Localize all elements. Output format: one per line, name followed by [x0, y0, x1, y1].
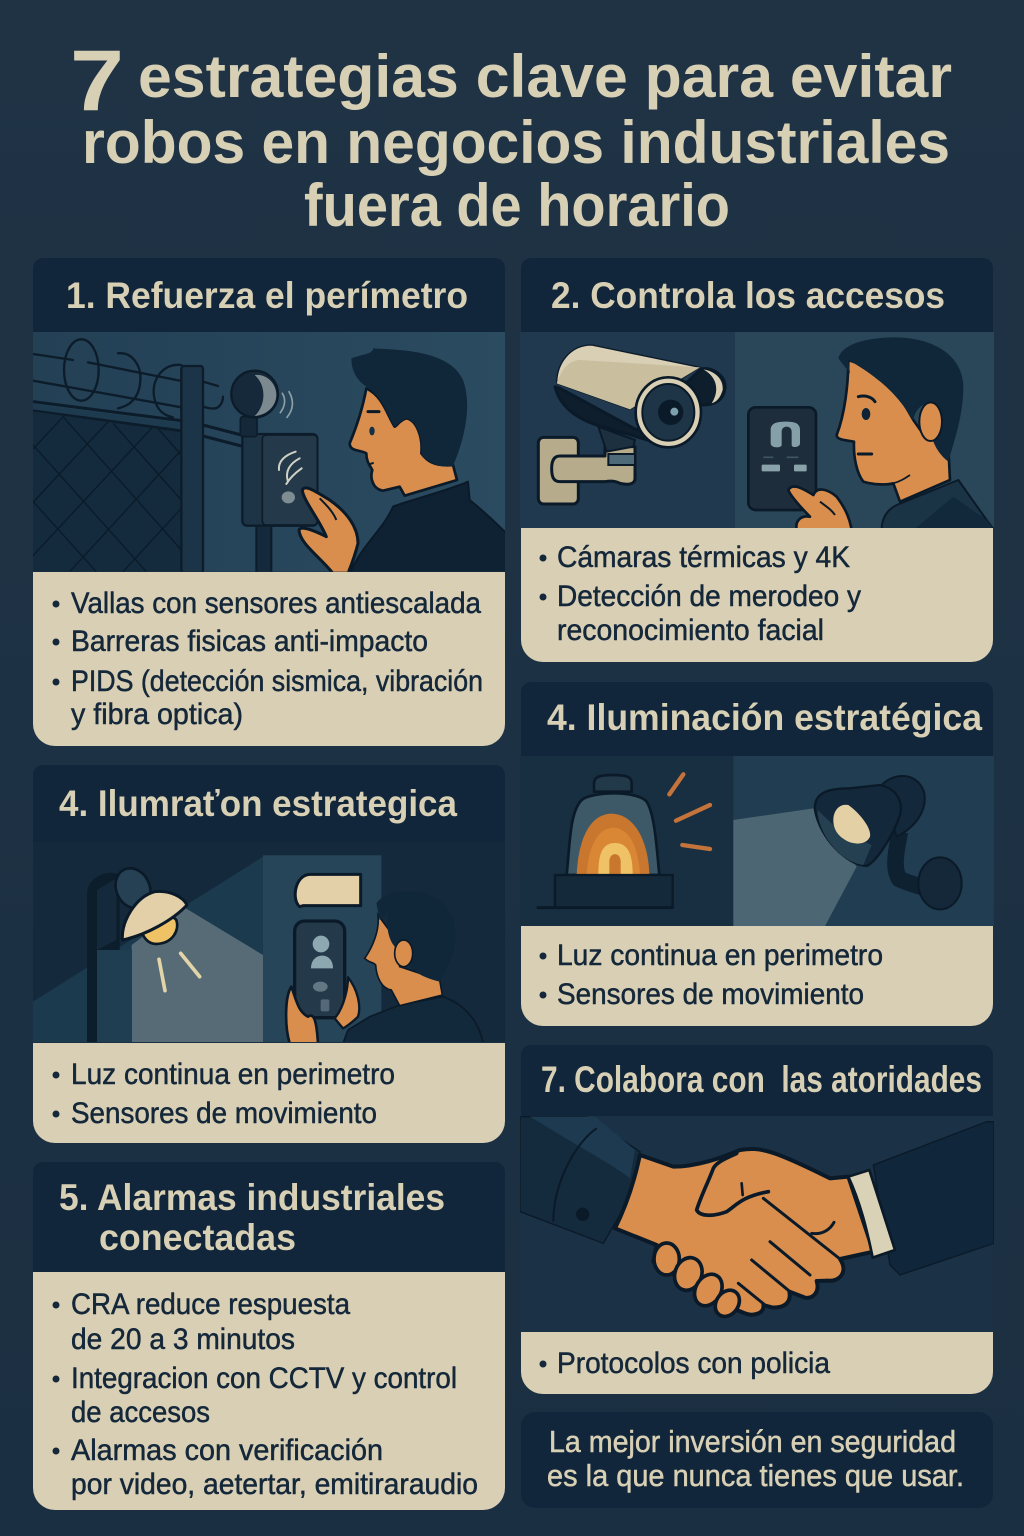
text block: bullet panel 7: Protocolos con policia: [557, 1347, 830, 1380]
title: [70, 33, 952, 239]
panel: 7 colabora con las autoridades: [520, 1045, 994, 1394]
text block: bullets right lighting panel: [521, 926, 993, 1026]
text block: bullets left lighting panel: Luz continua en perimetro: [71, 1058, 395, 1091]
panel: 5 alarmas industriales: [33, 1162, 505, 1510]
title: robos en negocios industriales: [82, 109, 950, 176]
text block: bullets left lighting panel: Sensores de movimiento: [71, 1097, 377, 1130]
text block: bullets panel 2: Cámaras térmicas y 4K: [557, 541, 850, 574]
callout: closing message: [521, 1412, 993, 1508]
text block: bullets panel 5: de accesos: [71, 1396, 210, 1429]
heading: refuerza el perímetro: 1. Refuerza el perímetro: [66, 275, 468, 316]
text block: bullets panel 5: por video, aetertar, emitiraraudio: [71, 1468, 478, 1501]
illustration: beacon and wall light: [520, 756, 994, 926]
heading: alarmas industriales conectadas: conectadas: [99, 1217, 296, 1258]
title: estrategias clave para evitar: [138, 43, 952, 110]
text block: bullets panel 1: Barreras fisicas anti-impacto: [71, 625, 428, 658]
illustration: handshake: [520, 1116, 994, 1333]
callout: closing message: es la que nunca tienes que usar.: [547, 1458, 964, 1493]
panel: 2 controla los accesos: [520, 258, 994, 662]
text block: bullets left lighting panel: [33, 1043, 505, 1143]
text block: bullets panel 1: PIDS (detección sismica, vibración: [71, 665, 483, 698]
title: fuera de horario: [304, 172, 730, 239]
title: 7: [70, 33, 124, 129]
text block: bullets panel 1: y fibra optica): [71, 698, 243, 731]
illustration: street lamp and intercom: [33, 842, 505, 1043]
text block: bullets panel 5: CRA reduce respuesta: [71, 1288, 350, 1321]
text block: bullets panel 2: reconocimiento facial: [557, 614, 824, 647]
text block: bullets right lighting panel: Sensores de movimiento: [557, 978, 864, 1011]
text block: bullets panel 2: [521, 528, 993, 662]
text block: bullets panel 1: Vallas con sensores antiescalada: [71, 587, 481, 620]
heading: iluminación estratégica: 4. Iluminación estratégica: [547, 697, 982, 738]
panel: 4 iluminación estratégica (right): [520, 682, 994, 1026]
heading: ilumraťon estrategica: 4. Ilumraťon estrategica: [59, 783, 457, 824]
panel: 4 iluminación estratégica (left): [33, 765, 505, 1143]
text block: bullets panel 1: [33, 572, 505, 746]
text block: bullet panel 7: [521, 1332, 993, 1394]
text block: bullets panel 2: Detección de merodeo y: [557, 580, 861, 613]
callout: closing message: La mejor inversión en seguridad: [549, 1424, 956, 1459]
panel: 1 refuerza el perímetro: [20, 258, 506, 746]
heading: alarmas industriales conectadas: [59, 1177, 445, 1258]
heading: alarmas industriales conectadas: 5. Alarmas industriales: [59, 1177, 445, 1218]
illustration: fence, sensor and guard: [20, 332, 506, 573]
text block: bullets right lighting panel: Luz continua en perimetro: [557, 939, 883, 972]
heading: controla los accesos: 2. Controla los accesos: [551, 275, 945, 316]
text block: bullets panel 5: Integracion con CCTV y control: [71, 1362, 457, 1395]
text block: bullets panel 5: de 20 a 3 minutos: [71, 1323, 295, 1356]
illustration: camera and access keypad: [520, 332, 994, 530]
text block: bullets panel 5: [33, 1272, 505, 1510]
text block: bullets panel 5: Alarmas con verificación: [71, 1434, 383, 1467]
